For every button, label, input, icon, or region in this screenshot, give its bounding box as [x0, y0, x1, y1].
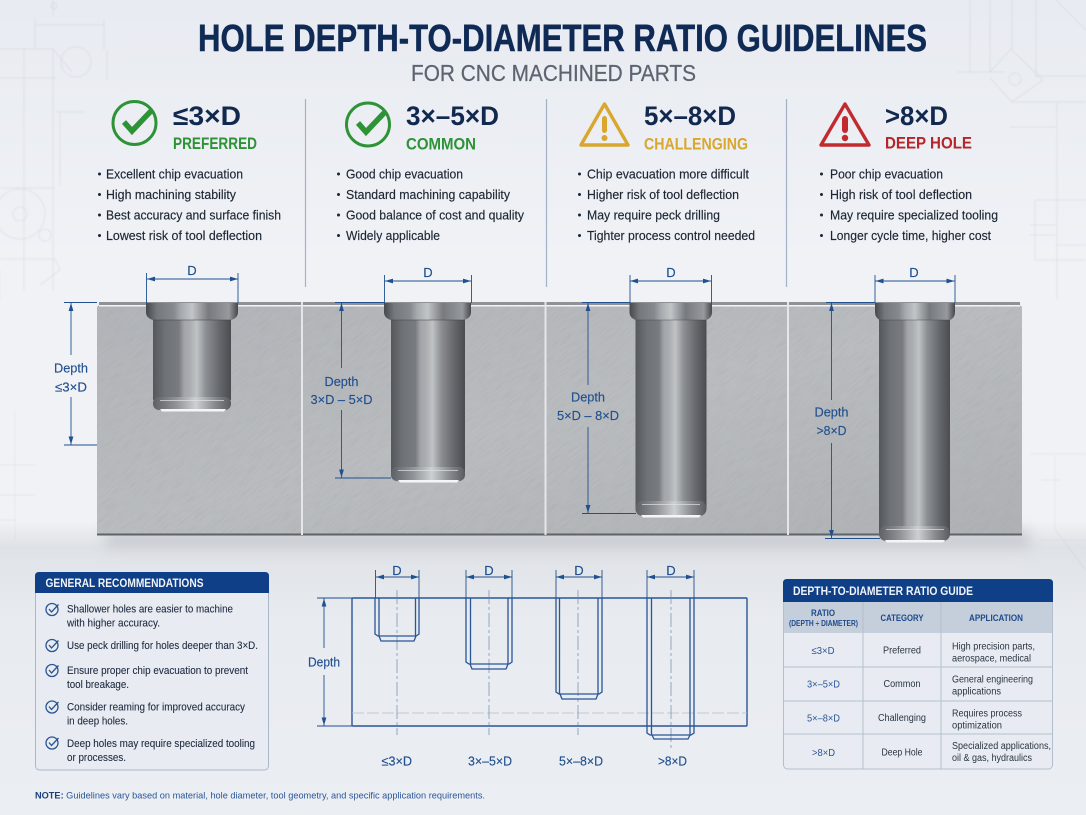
panel heading: GENERAL RECOMMENDATIONS [46, 576, 204, 590]
dimension: depth 4: >8×D [816, 423, 846, 438]
ratio heading: ≤3×D [173, 101, 241, 131]
column: challenging [578, 101, 755, 243]
recommendation text: tool breakage. [67, 679, 129, 691]
bullet list: Longer cycle time, higher cost [830, 229, 992, 243]
icon: red warning triangle [821, 104, 869, 145]
column: preferred [98, 101, 281, 243]
table: depth-to-diameter ratio guide [783, 579, 1053, 769]
table row: preferred: Preferred [883, 646, 921, 656]
drawing D dimensions [376, 570, 694, 598]
table row: common: applications [952, 686, 1001, 698]
table row: challenging: Requires process [952, 708, 1022, 720]
recommendation text: Deep holes may require specialized tooling [67, 738, 255, 750]
bullet list: Best accuracy and surface finish [106, 208, 281, 222]
table row: deep hole: >8×D [812, 747, 835, 759]
drawing holes [375, 598, 694, 739]
bullet list: Lowest risk of tool deflection [106, 229, 262, 243]
bullet list: Good chip evacuation [346, 168, 463, 182]
drawing D labels: D [666, 563, 676, 578]
dimension: depth 2: 3×D – 5×D [310, 392, 372, 407]
title: HOLE DEPTH-TO-DIAMETER RATIO GUIDELINES [198, 18, 927, 60]
recommendation text: Use peck drilling for holes deeper than 3×D. [67, 640, 258, 652]
table row: deep hole [812, 741, 1051, 764]
hole 2 [384, 303, 471, 482]
dimension: D markers on block [146, 273, 955, 303]
D labels on block: D [187, 263, 197, 278]
table column headers: (DEPTH ÷ DIAMETER) [789, 619, 858, 628]
blueprint sketch: top right [957, 0, 1086, 300]
check icons [46, 604, 58, 749]
machined block cross-section [97, 302, 1022, 542]
bullet list: Widely applicable [346, 229, 440, 243]
table column headers [789, 608, 1023, 628]
drawing ratio labels: 5×–8×D [559, 754, 603, 768]
category label: PREFERRED [173, 135, 257, 153]
blueprint sketch: lower left and right [0, 270, 1086, 570]
ratio heading: 5×–8×D [644, 101, 736, 131]
recommendation text: Ensure proper chip evacuation to prevent [67, 665, 248, 677]
table row: challenging: optimization [952, 720, 1002, 732]
drawing D labels: D [574, 563, 584, 578]
ratio heading: 3×–5×D [406, 101, 499, 131]
drawing ratio labels: ≤3×D [382, 754, 412, 768]
icon: green check [346, 103, 390, 146]
recommendation text [66, 604, 258, 764]
drawing outline [352, 598, 747, 726]
bullet list: Excellent chip evacuation [106, 168, 243, 182]
bullet list: High machining stability [106, 188, 237, 202]
table row: challenging: Challenging [878, 713, 926, 724]
column: common [337, 101, 525, 243]
table row: deep hole: Deep Hole [882, 748, 923, 758]
dimension: depth 1: Depth [54, 360, 88, 376]
table row: deep hole: Specialized applications, [952, 741, 1051, 752]
dimension: depth 4 [814, 302, 880, 538]
technical drawing [308, 563, 747, 768]
bullet list: Standard machining capability [346, 188, 511, 202]
ratio heading: >8×D [885, 101, 948, 131]
column: deep hole [820, 101, 998, 243]
drawing D labels [392, 563, 676, 578]
table column headers: RATIO [811, 608, 835, 619]
dimension: depth 3 [557, 302, 636, 514]
category label: CHALLENGING [644, 136, 748, 154]
table column header background [784, 602, 1052, 633]
panel: general recommendations [35, 572, 269, 770]
hole 4 [875, 303, 955, 542]
table row: preferred: High precision parts, [952, 642, 1035, 652]
hole 3 [630, 303, 712, 518]
table column headers: APPLICATION [969, 613, 1023, 624]
dimension: depth 4: Depth [814, 404, 848, 420]
table row: challenging: 5×–8×D [807, 712, 840, 724]
hole 1 [146, 303, 238, 412]
table row: deep hole: oil & gas, hydraulics [952, 753, 1032, 764]
blueprint sketch: top left [0, 0, 107, 290]
dimension: depth 1 [54, 302, 97, 445]
dimension: depth 2: Depth [324, 374, 358, 389]
table title bar [783, 579, 1053, 602]
table row: common: General engineering [952, 674, 1033, 686]
drawing D labels: D [484, 563, 494, 578]
dimension: depth 1: ≤3×D [55, 380, 87, 394]
bullet list: Poor chip evacuation [830, 168, 943, 182]
D labels on block [187, 263, 919, 280]
floor shadow beneath block [105, 530, 1030, 548]
drawing ratio labels: >8×D [658, 754, 687, 768]
bullet list: High risk of tool deflection [830, 188, 972, 202]
dimension: depth 3: 5×D – 8×D [557, 408, 619, 423]
D labels on block: D [423, 265, 433, 280]
recommendation text: in deep holes. [67, 716, 128, 728]
table row: common: 3×–5×D [807, 678, 840, 690]
recommendation text: Consider reaming for improved accuracy [67, 702, 246, 714]
table row: preferred: aerospace, medical [952, 654, 1031, 664]
drawing depth dimension [308, 598, 352, 726]
table column headers: CATEGORY [880, 613, 924, 624]
category label: DEEP HOLE [885, 134, 972, 152]
drawing ratio labels: 3×–5×D [468, 754, 512, 768]
panel header [35, 572, 269, 593]
table title: DEPTH-TO-DIAMETER RATIO GUIDE [793, 584, 973, 598]
bullet list: Higher risk of tool deflection [587, 188, 739, 202]
category label: COMMON [406, 136, 476, 154]
bullet list [578, 168, 755, 243]
icon: amber warning triangle [581, 104, 628, 145]
dimension: depth 2 [310, 302, 391, 478]
recommendation text: or processes. [67, 752, 126, 764]
bullet list: Tighter process control needed [587, 229, 755, 243]
drawing depth dimension: Depth [308, 654, 340, 670]
table row: common: Common [884, 679, 920, 690]
D labels on block: D [666, 265, 676, 280]
icon: green check [113, 102, 156, 144]
recommendation text: with higher accuracy. [66, 618, 160, 630]
recommendation text: Shallower holes are easier to machine [67, 604, 233, 616]
footnote: NOTE: Guidelines vary based on material, hole diameter, tool geometry, and specific application requirements. [35, 790, 485, 802]
D labels on block: D [909, 265, 919, 280]
bullet list: May require specialized tooling [830, 208, 998, 222]
bullet list: Good balance of cost and quality [346, 208, 525, 222]
table row: preferred [812, 642, 1035, 664]
subtitle: FOR CNC MACHINED PARTS [411, 60, 696, 86]
drawing ratio labels [382, 754, 687, 768]
bullet list [820, 168, 998, 243]
table row: common [807, 674, 1033, 698]
table row: challenging [807, 708, 1022, 732]
bullet list: May require peck drilling [587, 208, 720, 222]
bullet list [98, 168, 281, 243]
dimension: depth 3: Depth [571, 390, 605, 404]
bullet list: Chip evacuation more difficult [587, 168, 750, 182]
bullet list [337, 168, 525, 243]
table row: preferred: ≤3×D [812, 645, 835, 657]
drawing D labels: D [392, 563, 402, 578]
